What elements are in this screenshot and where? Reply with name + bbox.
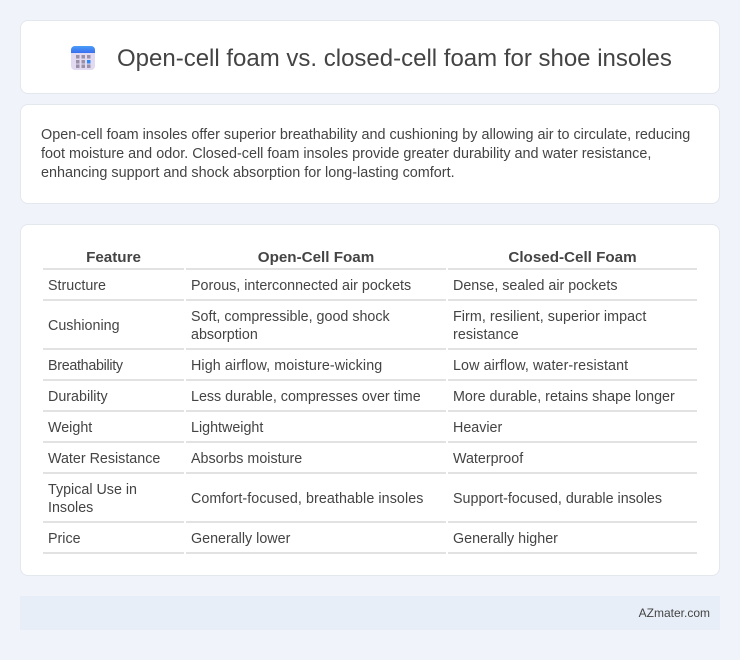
row: Water Resistance: Water Resistance: [48, 451, 160, 467]
title card: [20, 20, 720, 94]
comparison table: Waterproof: [453, 451, 523, 467]
comparison table: Less durable, compresses over time: [191, 389, 421, 405]
comparison table: Heavier: [453, 420, 502, 436]
comparison table: Comfort-focused, breathable insoles: [191, 491, 423, 507]
row: Typical Use in Insoles: [48, 482, 137, 516]
comparison table: Firm, resilient, superior impact: [453, 309, 646, 325]
title: Open-cell foam vs. closed-cell foam for shoe insoles: [117, 45, 672, 72]
comparison table: Support-focused, durable insoles: [453, 491, 662, 507]
summary text: [41, 127, 690, 181]
row: Durability: Durability: [48, 389, 108, 405]
summary text: enhancing support and shock absorption for long-lasting comfort.: [41, 165, 455, 181]
comparison table: Lightweight: [191, 420, 263, 436]
comparison table: absorption: [191, 327, 258, 343]
summary card: [20, 104, 720, 204]
header: Closed-Cell Foam: Closed-Cell Foam: [508, 249, 637, 266]
summary text: foot moisture and odor. Closed-cell foam insoles provide greater durability and water resistance,: [41, 146, 651, 162]
comparison table: Soft, compressible, good shock: [191, 309, 390, 325]
row: Typical Use in Insoles: Insoles: [48, 500, 93, 516]
comparison table: More durable, retains shape longer: [453, 389, 675, 405]
footer text: AZmater.com: [639, 606, 710, 620]
comparison table: resistance: [453, 327, 519, 343]
row: Breathability: Breathability: [48, 358, 123, 374]
comparison table card: [20, 224, 720, 576]
comparison table: Generally lower: [191, 531, 290, 547]
row: Price: Price: [48, 531, 81, 547]
comparison table: High airflow, moisture-wicking: [191, 358, 382, 374]
comparison table: Generally higher: [453, 531, 558, 547]
summary text: Open-cell foam insoles offer superior breathability and cushioning by allowing air to circulate, reducing: [41, 127, 690, 143]
row: Typical Use in Insoles: Typical Use in: [48, 482, 137, 498]
header: Feature: Feature: [86, 249, 141, 266]
comparison table: Porous, interconnected air pockets: [191, 278, 411, 294]
comparison table: Dense, sealed air pockets: [453, 278, 618, 294]
header: Open-Cell Foam: Open-Cell Foam: [258, 249, 374, 266]
row: Structure: Structure: [48, 278, 106, 294]
comparison table: Absorbs moisture: [191, 451, 302, 467]
row: Weight: Weight: [48, 420, 92, 436]
footer bar: [20, 596, 720, 630]
icon: calendar: [71, 46, 95, 70]
row: Cushioning: Cushioning: [48, 318, 120, 334]
comparison table: Low airflow, water-resistant: [453, 358, 628, 374]
